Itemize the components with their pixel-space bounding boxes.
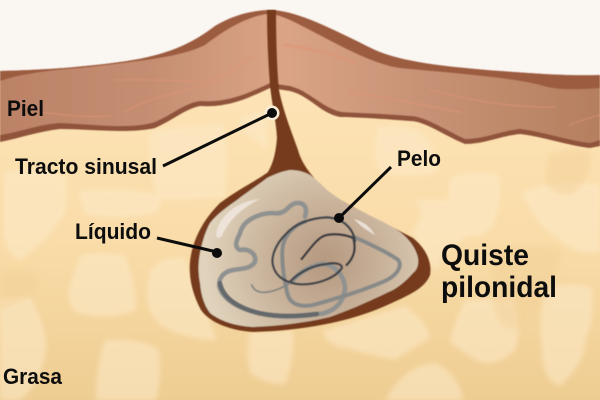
skin bottom outline	[0, 83, 600, 148]
thin hair strands	[302, 234, 355, 265]
label: Pelo with leader: Pelo	[397, 146, 441, 171]
highlights	[216, 199, 260, 238]
thick hair strands	[219, 203, 345, 316]
skin top outline	[0, 10, 600, 89]
label: Tracto sinusal with leader	[15, 106, 280, 179]
cyst fluid	[198, 170, 418, 327]
cyst and sinus tract	[190, 10, 430, 332]
sinus tract and cyst wall	[190, 10, 430, 332]
skin streaks	[40, 45, 600, 125]
fat layer	[0, 80, 600, 400]
label: Pelo with leader	[334, 146, 441, 223]
label: Tracto sinusal with leader: Tracto sinusal	[15, 154, 157, 179]
title: Quiste pilonidal: pilonidal	[441, 271, 557, 304]
label: Líquido with leader: Líquido	[75, 219, 151, 244]
hair	[219, 203, 400, 316]
label: Piel: Piel	[7, 96, 44, 121]
label: Líquido with leader	[75, 219, 222, 258]
title: Quiste pilonidal: Quiste	[441, 239, 529, 272]
label: Grasa: Grasa	[3, 364, 63, 389]
title: Quiste pilonidal	[441, 239, 557, 304]
skin layer	[0, 10, 600, 148]
